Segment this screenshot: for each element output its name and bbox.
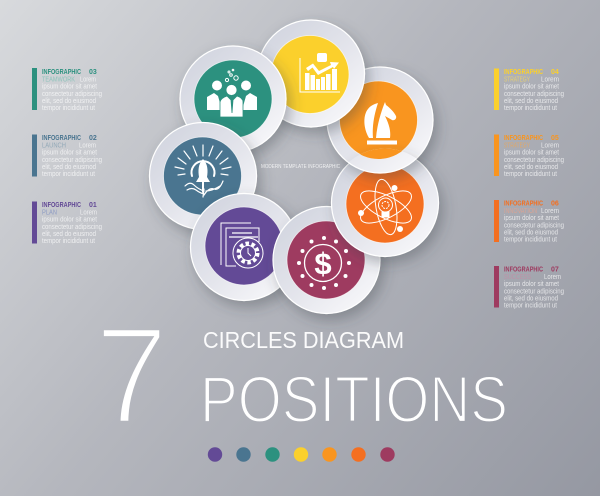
text block: infographic 01: Lorem bbox=[80, 210, 97, 216]
text block: infographic 06: elit, sed do eiusmod bbox=[504, 230, 558, 236]
text block: infographic 04: Lorem bbox=[541, 76, 559, 84]
text block: infographic 02: INFOGRAPHIC bbox=[42, 135, 81, 142]
icon: team with gears bbox=[207, 69, 257, 117]
text block: infographic 07 bbox=[494, 266, 564, 310]
text block: infographic 01: 01 bbox=[89, 202, 97, 209]
icon: bar chart with arrow bbox=[300, 53, 340, 92]
text block: infographic 01: elit, sed do eiusmod bbox=[42, 231, 96, 238]
text block: infographic 02: LAUNCH bbox=[42, 142, 66, 150]
text block: infographic 05: tempor incididunt ut bbox=[504, 171, 557, 178]
text block: infographic 01: tempor incididunt ut bbox=[42, 238, 95, 245]
icon: documents and gear clock bbox=[221, 223, 263, 268]
text block: infographic 06: INFOGRAPHIC bbox=[504, 200, 543, 208]
text block: infographic 01: consectetur adipiscing bbox=[42, 224, 102, 231]
text block: infographic 06 bbox=[494, 200, 564, 244]
disc: yellow bbox=[258, 20, 364, 127]
disc: deep orange bbox=[332, 150, 438, 256]
text block: infographic 04: consectetur adipiscing bbox=[504, 91, 564, 98]
disc: blue bbox=[150, 122, 256, 230]
icon: atom with light bulb bbox=[356, 178, 416, 236]
text block: infographic 04: 04 bbox=[551, 69, 559, 76]
text block: infographic 05: elit, sed do eiusmod bbox=[504, 164, 558, 171]
text block: infographic 07: elit, sed do eiusmod bbox=[504, 296, 558, 302]
text block: infographic 02: consectetur adipiscing bbox=[42, 157, 102, 164]
text block: infographic 03: tempor incididunt ut bbox=[42, 105, 95, 112]
text block: infographic 06: INNOVATION bbox=[504, 208, 537, 215]
text block: infographic 02: Lorem bbox=[79, 142, 96, 150]
text block: infographic 05: 05 bbox=[551, 135, 559, 142]
text block: infographic 01: PLAN bbox=[42, 210, 57, 216]
icon: dollar coin: $ bbox=[314, 246, 332, 281]
heading: circles diagram: CIRCLES DIAGRAM bbox=[203, 327, 404, 353]
text block: infographic 07: Lorem bbox=[544, 274, 561, 281]
text block: infographic 03: Lorem bbox=[80, 76, 96, 84]
disc: orange bbox=[327, 67, 433, 173]
text block: infographic 04: STRATEGY bbox=[504, 76, 530, 84]
icon: rocket and sun bbox=[175, 145, 231, 197]
center caption: MODERN TEMPLATE INFOGRAPHIC bbox=[261, 164, 340, 170]
text block: infographic 01: ipsum dolor sit amet bbox=[42, 216, 97, 224]
icon: dollar coin bbox=[297, 236, 351, 290]
text block: infographic 02: elit, sed do eiusmod bbox=[42, 164, 96, 171]
text block: infographic 05: ipsum dolor sit amet bbox=[504, 150, 559, 156]
text block: infographic 03: elit, sed do eiusmod bbox=[42, 98, 96, 105]
text block: infographic 06: Lorem bbox=[541, 208, 559, 215]
heading: positions: POSITIONS bbox=[200, 362, 508, 436]
text block: infographic 02: 02 bbox=[89, 135, 97, 142]
text block: infographic 07: SUCCESS bbox=[504, 274, 531, 281]
disc: orange lower overlap bbox=[342, 148, 428, 188]
colour dots legend bbox=[208, 447, 395, 462]
text block: infographic 03: INFOGRAPHIC bbox=[42, 69, 81, 76]
text block: infographic 07: consectetur adipiscing bbox=[504, 288, 564, 296]
text block: infographic 06: 06 bbox=[551, 200, 559, 208]
text block: infographic 03: 03 bbox=[89, 69, 97, 76]
text block: infographic 07: INFOGRAPHIC bbox=[504, 266, 543, 274]
text block: infographic 01: INFOGRAPHIC bbox=[42, 202, 81, 209]
disc: purple bbox=[190, 194, 298, 300]
text block: infographic 02 bbox=[32, 134, 102, 178]
big number seven: 7 bbox=[95, 299, 168, 453]
text block: infographic 07: tempor incididunt ut bbox=[504, 302, 557, 310]
text block: infographic 04: INFOGRAPHIC bbox=[504, 69, 543, 76]
text block: infographic 04: ipsum dolor sit amet bbox=[504, 84, 559, 90]
text block: infographic 03: ipsum dolor sit amet bbox=[42, 84, 97, 90]
text block: infographic 02: ipsum dolor sit amet bbox=[42, 150, 97, 156]
text block: infographic 03: consectetur adipiscing bbox=[42, 91, 102, 98]
text block: infographic 04 bbox=[494, 68, 564, 112]
text block: infographic 02: tempor incididunt ut bbox=[42, 171, 95, 178]
text block: infographic 03: TEAMWORK bbox=[42, 76, 75, 84]
text block: infographic 06: ipsum dolor sit amet bbox=[504, 215, 559, 222]
text block: infographic 04: tempor incididunt ut bbox=[504, 105, 557, 112]
text block: infographic 03 bbox=[32, 68, 102, 112]
text block: infographic 05: INFOGRAPHIC bbox=[504, 135, 543, 142]
text block: infographic 06: consectetur adipiscing bbox=[504, 222, 564, 230]
icon: chess knight bbox=[364, 102, 397, 144]
text block: infographic 05: STRATEGY bbox=[504, 142, 530, 150]
text block: infographic 06: tempor incididunt ut bbox=[504, 236, 557, 244]
text block: infographic 05: consectetur adipiscing bbox=[504, 157, 564, 164]
text block: infographic 07: 07 bbox=[551, 266, 559, 274]
text block: infographic 01 bbox=[32, 202, 102, 245]
text block: infographic 04: elit, sed do eiusmod bbox=[504, 98, 558, 105]
text block: infographic 05: Lorem bbox=[541, 142, 559, 150]
text block: infographic 07: ipsum dolor sit amet bbox=[504, 281, 559, 288]
text block: infographic 05 bbox=[494, 134, 564, 178]
disc: teal bbox=[180, 46, 286, 152]
disc: crimson bbox=[273, 206, 380, 314]
